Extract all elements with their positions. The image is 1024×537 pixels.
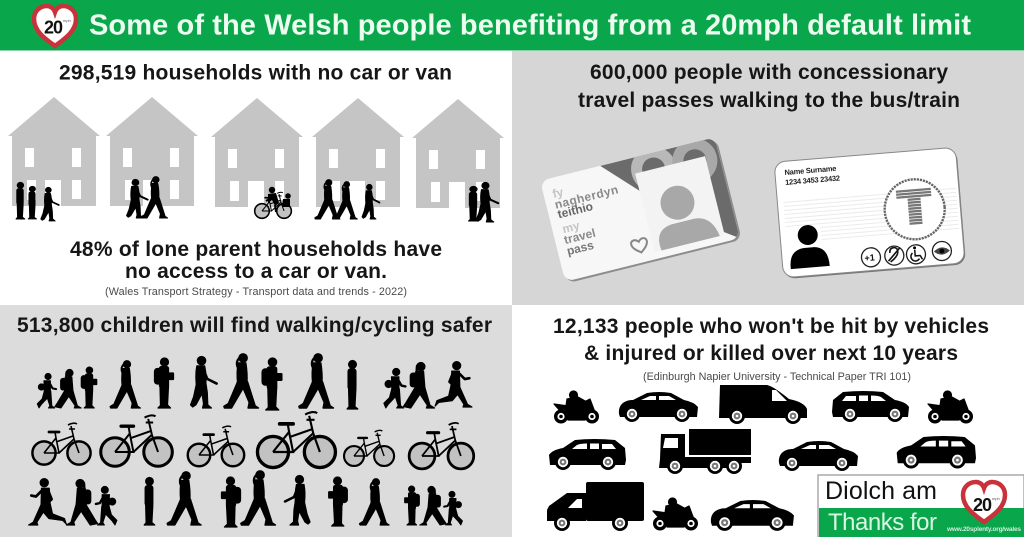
van bbox=[719, 385, 807, 424]
card: Transport for Wales pass: Name Surname bbox=[784, 164, 837, 177]
heading: travel passes: travel passes walking to the bus/train bbox=[578, 89, 960, 112]
panel: people not hit by vehicles bbox=[547, 315, 1024, 537]
title: Some of the Welsh people benefiting from a 20mph default limit bbox=[89, 10, 971, 42]
card: my travel pass bbox=[540, 136, 742, 284]
text: Thanks for: Thanks for bbox=[828, 509, 937, 536]
house 4 bbox=[312, 98, 404, 207]
car 3 bbox=[711, 500, 794, 531]
people: couple walking bbox=[127, 177, 168, 218]
card: my travel pass: my bbox=[561, 218, 581, 236]
panel: children walking and cycling bbox=[17, 314, 492, 527]
logo: 20mph heart: mph bbox=[992, 496, 1000, 501]
card: Transport for Wales pass bbox=[774, 147, 966, 279]
row of children top bbox=[37, 354, 472, 410]
logo: 20mph heart bbox=[34, 6, 76, 46]
truck bbox=[659, 429, 751, 474]
text: lone parent statistic: no access to a car or van. bbox=[125, 260, 387, 283]
card: Transport for Wales pass: +1 bbox=[864, 252, 875, 263]
logo: 20mph heart bbox=[963, 482, 1005, 522]
heading: children: 513,800 children will find walking/cycling safer bbox=[17, 314, 492, 337]
SUV 2 bbox=[549, 439, 626, 470]
box van bbox=[547, 482, 644, 531]
text: lone parent statistic: 48% of lone parent households have bbox=[70, 238, 442, 261]
car 1 bbox=[619, 392, 698, 422]
house 5 bbox=[412, 99, 504, 208]
url: www.20splenty.org/wales bbox=[946, 526, 1021, 533]
logo: 20mph heart: 20 bbox=[973, 495, 992, 515]
SUV 1 bbox=[832, 391, 909, 422]
callout: thanks box bbox=[818, 475, 1024, 537]
logo: 20mph heart: 20 bbox=[44, 18, 63, 38]
panel: concessionary travel passes bbox=[540, 61, 966, 284]
people: family of three bbox=[16, 182, 59, 221]
card: my travel pass: fy bbox=[551, 185, 565, 201]
motorbike 1 bbox=[554, 391, 598, 423]
estate car bbox=[897, 436, 976, 468]
motorbike 2 bbox=[928, 391, 972, 423]
logo: 20mph heart: mph bbox=[63, 18, 71, 23]
heading: travel passes bbox=[578, 61, 960, 112]
card: my travel pass: nagherdyn bbox=[553, 182, 620, 212]
card: my travel pass: pass bbox=[565, 238, 596, 258]
source: Wales Transport Strategy: (Wales Transport Strategy - Transport data and trends - 2022) bbox=[105, 286, 407, 298]
house 3 bbox=[211, 98, 303, 207]
house 2 bbox=[106, 97, 198, 206]
card: Transport for Wales pass: 1234 3453 23432 bbox=[785, 174, 840, 187]
heading: casualties: & injured or killed over next 10 years bbox=[584, 342, 958, 365]
panel: households with no car or van bbox=[8, 62, 504, 298]
text: Diolch am: Diolch am bbox=[825, 477, 937, 505]
row of children bottom bbox=[29, 471, 463, 527]
heading: travel passes: 600,000 people with concessionary bbox=[590, 61, 948, 84]
header banner bbox=[0, 0, 1024, 50]
heading: casualties bbox=[553, 315, 989, 365]
people: three walking bbox=[315, 180, 380, 219]
car 2 bbox=[779, 441, 858, 471]
text: lone parent statistic bbox=[70, 238, 442, 283]
heading: casualties: 12,133 people who won't be hit by vehicles bbox=[553, 315, 989, 338]
card: my travel pass: travel bbox=[562, 226, 597, 247]
card: my travel pass: teithio bbox=[556, 199, 594, 221]
cyclist with child seat bbox=[255, 187, 291, 218]
heading: households: 298,519 households with no car or van bbox=[59, 62, 452, 84]
row of bicycles bbox=[32, 412, 474, 469]
house 1 bbox=[8, 97, 100, 206]
people: couple standing bbox=[468, 182, 498, 222]
source: Edinburgh Napier University: (Edinburgh Napier University - Technical Paper TRI 101) bbox=[643, 371, 911, 383]
motorbike 3 bbox=[653, 498, 697, 530]
